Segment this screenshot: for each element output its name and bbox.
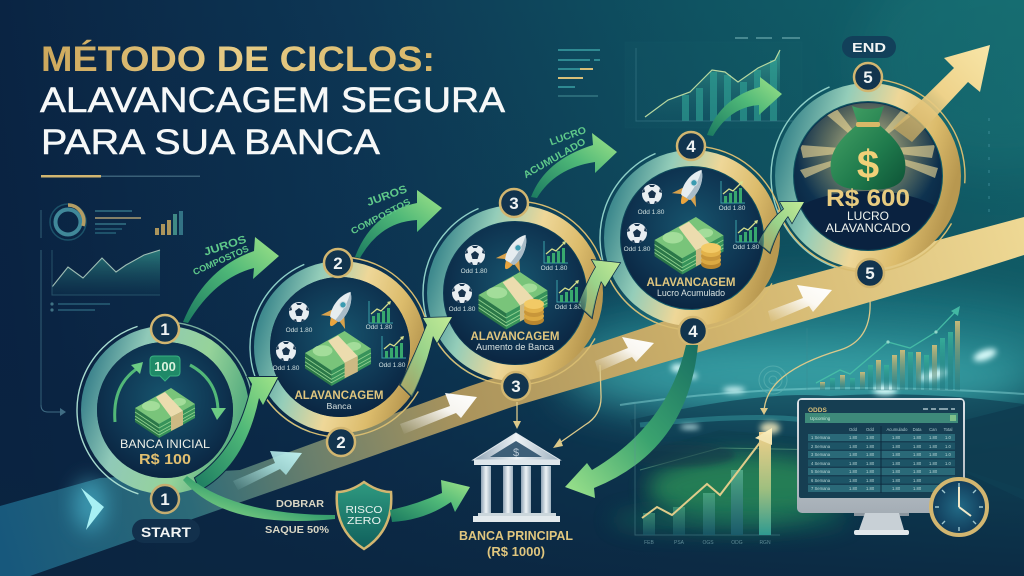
growth bar chart: RGN	[759, 540, 771, 546]
cycle 2 icons: Odd 1.80	[379, 362, 406, 369]
badge top 4: 4	[686, 137, 696, 156]
monitor with odds table: 1.80	[849, 478, 858, 483]
cycle 3 ring	[389, 167, 641, 419]
monitor with odds table: 1.0	[945, 444, 951, 449]
text: profit amount: ALAVANCADO	[826, 223, 911, 235]
monitor with odds table: 1 Semana	[811, 435, 831, 440]
text: juros compostos labels	[191, 125, 588, 277]
cycle 2 icons	[273, 285, 406, 386]
green arrow to bank	[390, 480, 470, 522]
badge bottom 4	[679, 317, 707, 345]
connector arrow: cycle 4 to 5	[758, 202, 804, 253]
text: initial bankroll: R$ 100	[139, 451, 191, 468]
cycle 3 icons	[449, 228, 582, 330]
start pill	[132, 519, 200, 543]
monitor with odds table: 1.80	[913, 452, 922, 457]
monitor with odds table: 1.80	[929, 469, 938, 474]
monitor with odds table	[797, 398, 965, 535]
cycle 3 icons: Odd 1.80	[555, 304, 582, 311]
cycle 4 icons: Odd 1.80	[719, 205, 746, 212]
monitor with odds table: 1.80	[929, 435, 938, 440]
monitor with odds table: 1.80	[866, 486, 875, 491]
shield: risco zero	[337, 482, 391, 549]
badge bottom 2	[327, 428, 355, 456]
start chevron	[74, 479, 106, 531]
monitor with odds table: 1.80	[913, 444, 922, 449]
monitor with odds table: 1.80	[849, 435, 858, 440]
cycle 2 label: ALAVANCAGEM	[294, 388, 384, 402]
monitor with odds table: 1.80	[892, 452, 901, 457]
big green arrow from cycle 4 to bank	[565, 345, 698, 498]
start pill: START	[141, 524, 191, 540]
monitor with odds table: 1.80	[929, 444, 938, 449]
badge top 5	[854, 63, 882, 91]
monitor with odds table: Data	[913, 427, 922, 432]
band arrows	[74, 285, 832, 531]
monitor with odds table: 1.80	[892, 444, 901, 449]
cycle 4 icons: Odd 1.80	[624, 246, 651, 253]
monitor with odds table: 1.80	[892, 461, 901, 466]
monitor with odds table: 1.80	[892, 478, 901, 483]
title: ALAVANCAGEM SEGURA	[40, 81, 506, 120]
shield: risco zero: ZERO	[347, 515, 381, 527]
badge top 2	[324, 249, 352, 277]
badge bottom 3	[502, 372, 530, 400]
cycle 2 icons: Odd 1.80	[273, 365, 300, 372]
curved cycle arrows	[115, 365, 218, 422]
monitor with odds table: 1.80	[866, 452, 875, 457]
growth bar chart: ODG	[731, 540, 743, 546]
cycle 1 ring	[54, 299, 276, 521]
stadium backdrop	[560, 285, 1024, 536]
cycle 4 icons: Odd 1.80	[638, 209, 665, 216]
title: PARA SUA BANCA	[41, 123, 381, 162]
growth bar chart: PSA	[674, 540, 685, 546]
curved cycle arrowheads	[131, 362, 226, 420]
arrows: juros compostos 2	[355, 190, 442, 258]
big gold arrow	[893, 45, 990, 142]
monitor with odds table: 1.80	[913, 478, 922, 483]
badge top 1	[151, 315, 179, 343]
cycle 2 label	[294, 388, 384, 411]
text: juros compostos labels: LUCRO	[548, 125, 588, 148]
monitor with odds table: 1.80	[892, 486, 901, 491]
money bag glow	[800, 103, 938, 242]
monitor with odds table: 1.80	[849, 461, 858, 466]
text: juros compostos labels: COMPOSTOS	[191, 243, 250, 277]
text: banca principal	[459, 528, 573, 559]
text: juros compostos labels: JUROS	[202, 234, 248, 259]
badge top 1: 1	[160, 320, 170, 339]
white arrow three	[768, 285, 832, 322]
icon: money bag: $	[857, 143, 879, 187]
monitor with odds table: 1.80	[913, 461, 922, 466]
target icon	[759, 366, 787, 394]
gold connector arrowheads	[513, 408, 768, 448]
icon: bank	[473, 433, 560, 522]
cycle 4 label: Lucro Acumulado	[657, 288, 725, 298]
growth bar chart: OGS	[702, 540, 714, 546]
top dashboard chart	[558, 38, 802, 128]
monitor with odds table: Can	[929, 427, 938, 432]
text: banca principal: BANCA PRINCIPAL	[459, 528, 573, 543]
badge top 2: 2	[333, 254, 343, 273]
badge top 3	[500, 189, 528, 217]
monitor with odds table: 2 Semana	[811, 444, 831, 449]
text: initial bankroll	[120, 439, 211, 468]
rising bars chart upper right	[807, 306, 960, 390]
cycle 3 label	[470, 329, 560, 352]
monitor with odds table: 1.80	[849, 469, 858, 474]
gold connector lines	[517, 300, 870, 444]
monitor with odds table: 1.80	[866, 435, 875, 440]
cycle 4 icons	[624, 163, 760, 274]
end pill: END	[852, 40, 886, 55]
connector arrow: cycle 2 to 3	[400, 317, 452, 397]
badge bottom 2: 2	[336, 433, 346, 452]
monitor with odds table: 1.80	[892, 469, 901, 474]
cycle 4 label: ALAVANCAGEM	[646, 275, 736, 289]
cycle 4 label	[646, 275, 736, 298]
white arrow two	[595, 337, 654, 372]
icon: bank: $	[513, 447, 519, 459]
icon: 100 speech badge	[150, 356, 180, 381]
growth bar chart	[635, 403, 780, 546]
white arrow one	[400, 393, 477, 434]
monitor with odds table: Acumulado	[887, 427, 908, 432]
cycle 4 icons: Odd 1.80	[733, 244, 760, 251]
text: dobrar / saque: SAQUE 50%	[265, 524, 330, 536]
monitor with odds table: Total	[944, 427, 952, 432]
badge top 4	[677, 132, 705, 160]
cycle 2 icons: Odd 1.80	[366, 324, 393, 331]
icon: 100 speech badge: 100	[154, 359, 176, 374]
badge bottom 3: 3	[511, 377, 521, 396]
monitor with odds table: 1.80	[913, 435, 922, 440]
band: rising diagonal path	[0, 217, 1024, 576]
text: dobrar / saque: DOBRAR	[276, 498, 324, 510]
monitor with odds table: 1.80	[849, 486, 858, 491]
arrows: lucro acumulado	[531, 133, 617, 198]
text: juros compostos labels: COMPOSTOS	[349, 196, 412, 236]
badge bottom 5	[856, 259, 884, 287]
monitor with odds table: 7 Semana	[811, 486, 831, 491]
monitor with odds table: 1.80	[849, 452, 858, 457]
monitor with odds table: 1.0	[945, 435, 951, 440]
monitor with odds table: 1.80	[866, 444, 875, 449]
monitor with odds table: Odd	[849, 427, 858, 432]
monitor with odds table: 1.80	[913, 469, 922, 474]
cycle 2 ring	[217, 224, 463, 470]
arrows: juros compostos 1	[183, 237, 279, 323]
end pill	[842, 36, 896, 58]
monitor with odds table: 5 Semana	[811, 469, 831, 474]
text: profit amount: R$ 600	[826, 185, 910, 212]
monitor with odds table: 1.80	[866, 461, 875, 466]
text: juros compostos labels: JUROS	[365, 183, 409, 209]
cycle 3 icons: Odd 1.80	[541, 265, 568, 272]
cycle 3 label: Aumento de Banca	[476, 342, 554, 352]
green arrow to shield	[183, 476, 335, 521]
title underline	[41, 175, 200, 178]
monitor with odds table: 1.80	[929, 461, 938, 466]
monitor with odds table: 1.0	[945, 452, 951, 457]
badge bottom 1: 1	[160, 490, 170, 509]
connector arrow: cycle 3 to 4	[578, 260, 620, 318]
cycle 2 label: Banca	[326, 401, 352, 411]
title	[40, 39, 506, 162]
text: profit amount	[826, 185, 911, 235]
monitor with odds table: Odd	[866, 427, 875, 432]
cycle 2 icons: Odd 1.80	[286, 327, 313, 334]
cycle 3 label: ALAVANCAGEM	[470, 329, 560, 343]
cycle 4 ring	[566, 112, 818, 364]
title: MÉTODO DE CICLOS:	[41, 39, 435, 79]
light blue arrow	[233, 451, 302, 490]
text: profit amount: LUCRO	[847, 211, 889, 223]
badge bottom 5: 5	[865, 264, 875, 283]
badge bottom 4: 4	[688, 322, 698, 341]
monitor with odds table: 6 Semana	[811, 478, 831, 483]
monitor with odds table: 1.80	[866, 469, 875, 474]
cycle 3 icons: Odd 1.80	[449, 306, 476, 313]
step badges	[151, 63, 884, 513]
monitor with odds table: 1.0	[945, 461, 951, 466]
text: dobrar / saque	[265, 498, 330, 536]
monitor with odds table: 1.80	[849, 444, 858, 449]
monitor with odds table: Upcoming	[810, 416, 831, 421]
growth bar chart: FEB	[644, 540, 655, 546]
monitor with odds table: 1.80	[929, 452, 938, 457]
cycle 3 icons: Odd 1.80	[461, 268, 488, 275]
text: banca principal: (R$ 1000)	[487, 544, 545, 559]
top-left dashboard widgets	[41, 204, 183, 416]
monitor with odds table: 4 Semana	[811, 461, 831, 466]
shield: risco zero: RISCO	[346, 504, 382, 516]
badge top 3: 3	[509, 194, 519, 213]
monitor with odds table: 3 Semana	[811, 452, 831, 457]
badge top 5: 5	[863, 68, 873, 87]
arrow: cycle 4 rise	[707, 77, 782, 136]
badge bottom 1	[151, 485, 179, 513]
connector arrow: cycle 1 to 2	[195, 377, 278, 490]
monitor with odds table: 1.80	[892, 435, 901, 440]
monitor with odds table: 1.80	[913, 486, 922, 491]
monitor with odds table: ODDS	[808, 407, 827, 414]
cycle 5 ring	[770, 80, 966, 272]
text: juros compostos labels: ACUMULADO	[522, 136, 588, 181]
icon: clock	[931, 479, 987, 535]
icon: cash stack	[135, 388, 195, 438]
icon: money bag	[831, 106, 905, 190]
right faint dots	[988, 118, 990, 215]
text: initial bankroll: BANCA INICIAL	[120, 439, 211, 451]
monitor with odds table: 1.80	[866, 478, 875, 483]
